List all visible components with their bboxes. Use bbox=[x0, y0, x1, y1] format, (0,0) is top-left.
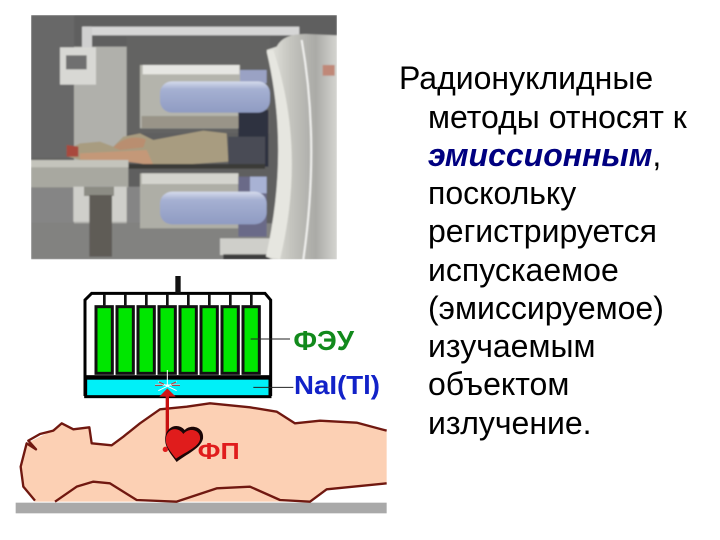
photo: gamma camera with patient bbox=[31, 15, 337, 259]
patient table bbox=[16, 503, 387, 513]
text block: description of emission methods: (эмиссируемое) bbox=[428, 290, 664, 326]
text block: description of emission methods: испускаемое bbox=[428, 252, 619, 288]
text block: description of emission methods: объектом bbox=[428, 366, 569, 402]
text block: description of emission methods: поскольку bbox=[428, 175, 576, 211]
label: ФЭУ: ФЭУ bbox=[293, 325, 355, 356]
NaI crystal bbox=[86, 377, 270, 397]
text block: description of emission methods: изучаемым bbox=[428, 328, 595, 364]
text block: description of emission methods: регистрируется bbox=[428, 213, 657, 249]
cable bbox=[175, 276, 181, 293]
text block: description of emission methods: эмиссионным, bbox=[428, 137, 661, 173]
heart bbox=[163, 426, 203, 462]
label: ФП: ФП bbox=[198, 438, 240, 464]
label: NaI(Tl): NaI(Tl) bbox=[294, 370, 380, 400]
label: NaI(Tl) bbox=[253, 370, 380, 400]
text block: description of emission methods: излучение. bbox=[428, 405, 592, 441]
label: ФЭУ bbox=[251, 325, 355, 356]
photomultiplier tubes bbox=[96, 295, 259, 373]
detector housing bbox=[85, 293, 271, 396]
diagram: patient under gamma camera detector bbox=[16, 276, 387, 513]
patient body bbox=[21, 403, 387, 502]
gamma ray arrow bbox=[159, 388, 176, 436]
illustration: photo of gamma camera and detector diagram bbox=[16, 15, 387, 514]
text block: description of emission methods: Радионуклидные bbox=[399, 60, 653, 96]
scintillation flash bbox=[155, 370, 180, 391]
text block: description of emission methods bbox=[399, 60, 687, 441]
text block: description of emission methods: методы относят к bbox=[428, 99, 687, 135]
